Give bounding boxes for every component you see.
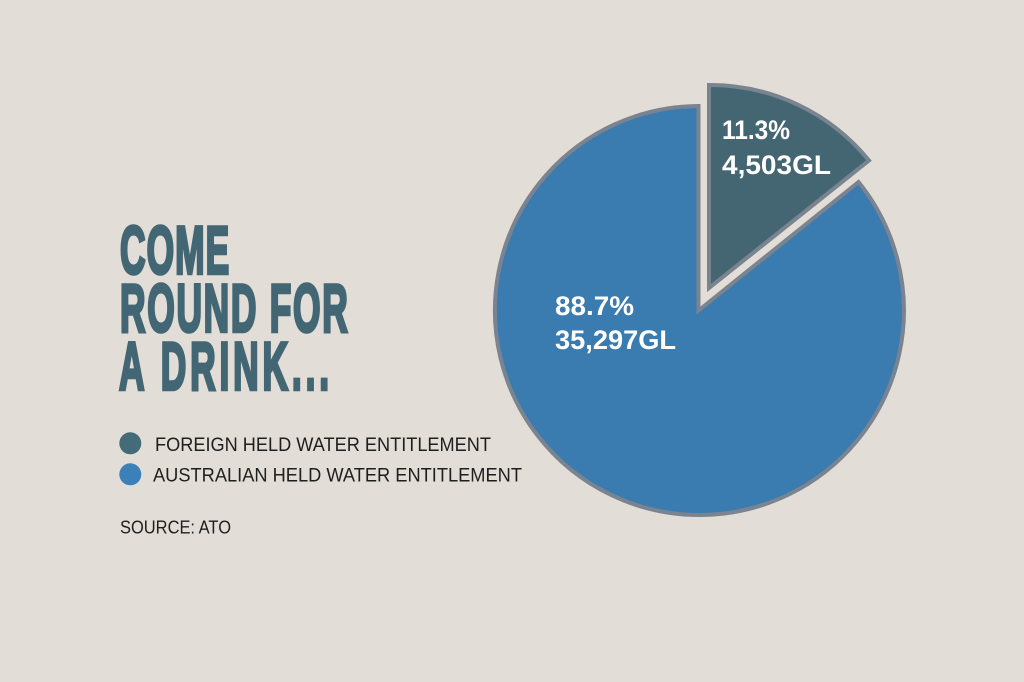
pie slice: foreign held 11.3% [709, 85, 869, 288]
pie slice: foreign held 11.3%: 4,503GL [722, 150, 831, 180]
legend [119, 432, 522, 487]
legend item: Australian held: AUSTRALIAN HELD WATER ENTITLEMENT [153, 465, 522, 487]
pie slice: foreign held 11.3%: 11.3% [722, 115, 790, 145]
pie slice: Australian held 88.7%: 35,297GL [555, 325, 676, 355]
pie chart [495, 85, 904, 515]
pie slice: Australian held 88.7%: 88.7% [555, 291, 634, 321]
title: A DRINK... [119, 329, 329, 405]
title [119, 213, 348, 405]
pie slice: Australian held 88.7% [495, 106, 904, 515]
title: ROUND FOR [120, 271, 348, 347]
legend item: foreign held: FOREIGN HELD WATER ENTITLEMENT [155, 434, 491, 456]
source note: SOURCE: ATO [120, 518, 231, 538]
title: COME [120, 213, 229, 289]
